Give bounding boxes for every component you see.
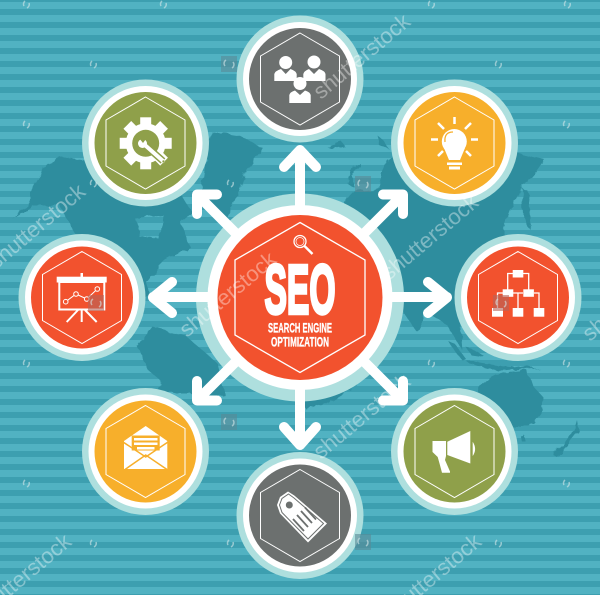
badge: org chart (454, 234, 582, 361)
arrows and centre ring (153, 150, 447, 445)
badge: envelope (82, 388, 209, 515)
badge: presentation board (18, 234, 146, 361)
subheading: SEARCH ENGINE (268, 320, 332, 336)
centre SEO badge: SEO (264, 250, 336, 328)
icon: magnifier (294, 236, 312, 254)
badge: light bulb (391, 80, 518, 206)
watermark text: shutterstock (308, 8, 416, 104)
watermark text: shutterstock (376, 189, 484, 285)
badge: gear and wrench (82, 80, 209, 206)
subheading: OPTIMIZATION (271, 334, 329, 350)
watermark text: shutterstock (308, 368, 416, 464)
watermark text: shutterstock (174, 246, 282, 342)
badge: megaphone (391, 388, 518, 515)
badge: people (236, 16, 364, 142)
world map (12, 130, 579, 456)
badge: price tag (236, 452, 364, 579)
subheading (268, 320, 332, 350)
centre SEO badge (218, 215, 382, 380)
